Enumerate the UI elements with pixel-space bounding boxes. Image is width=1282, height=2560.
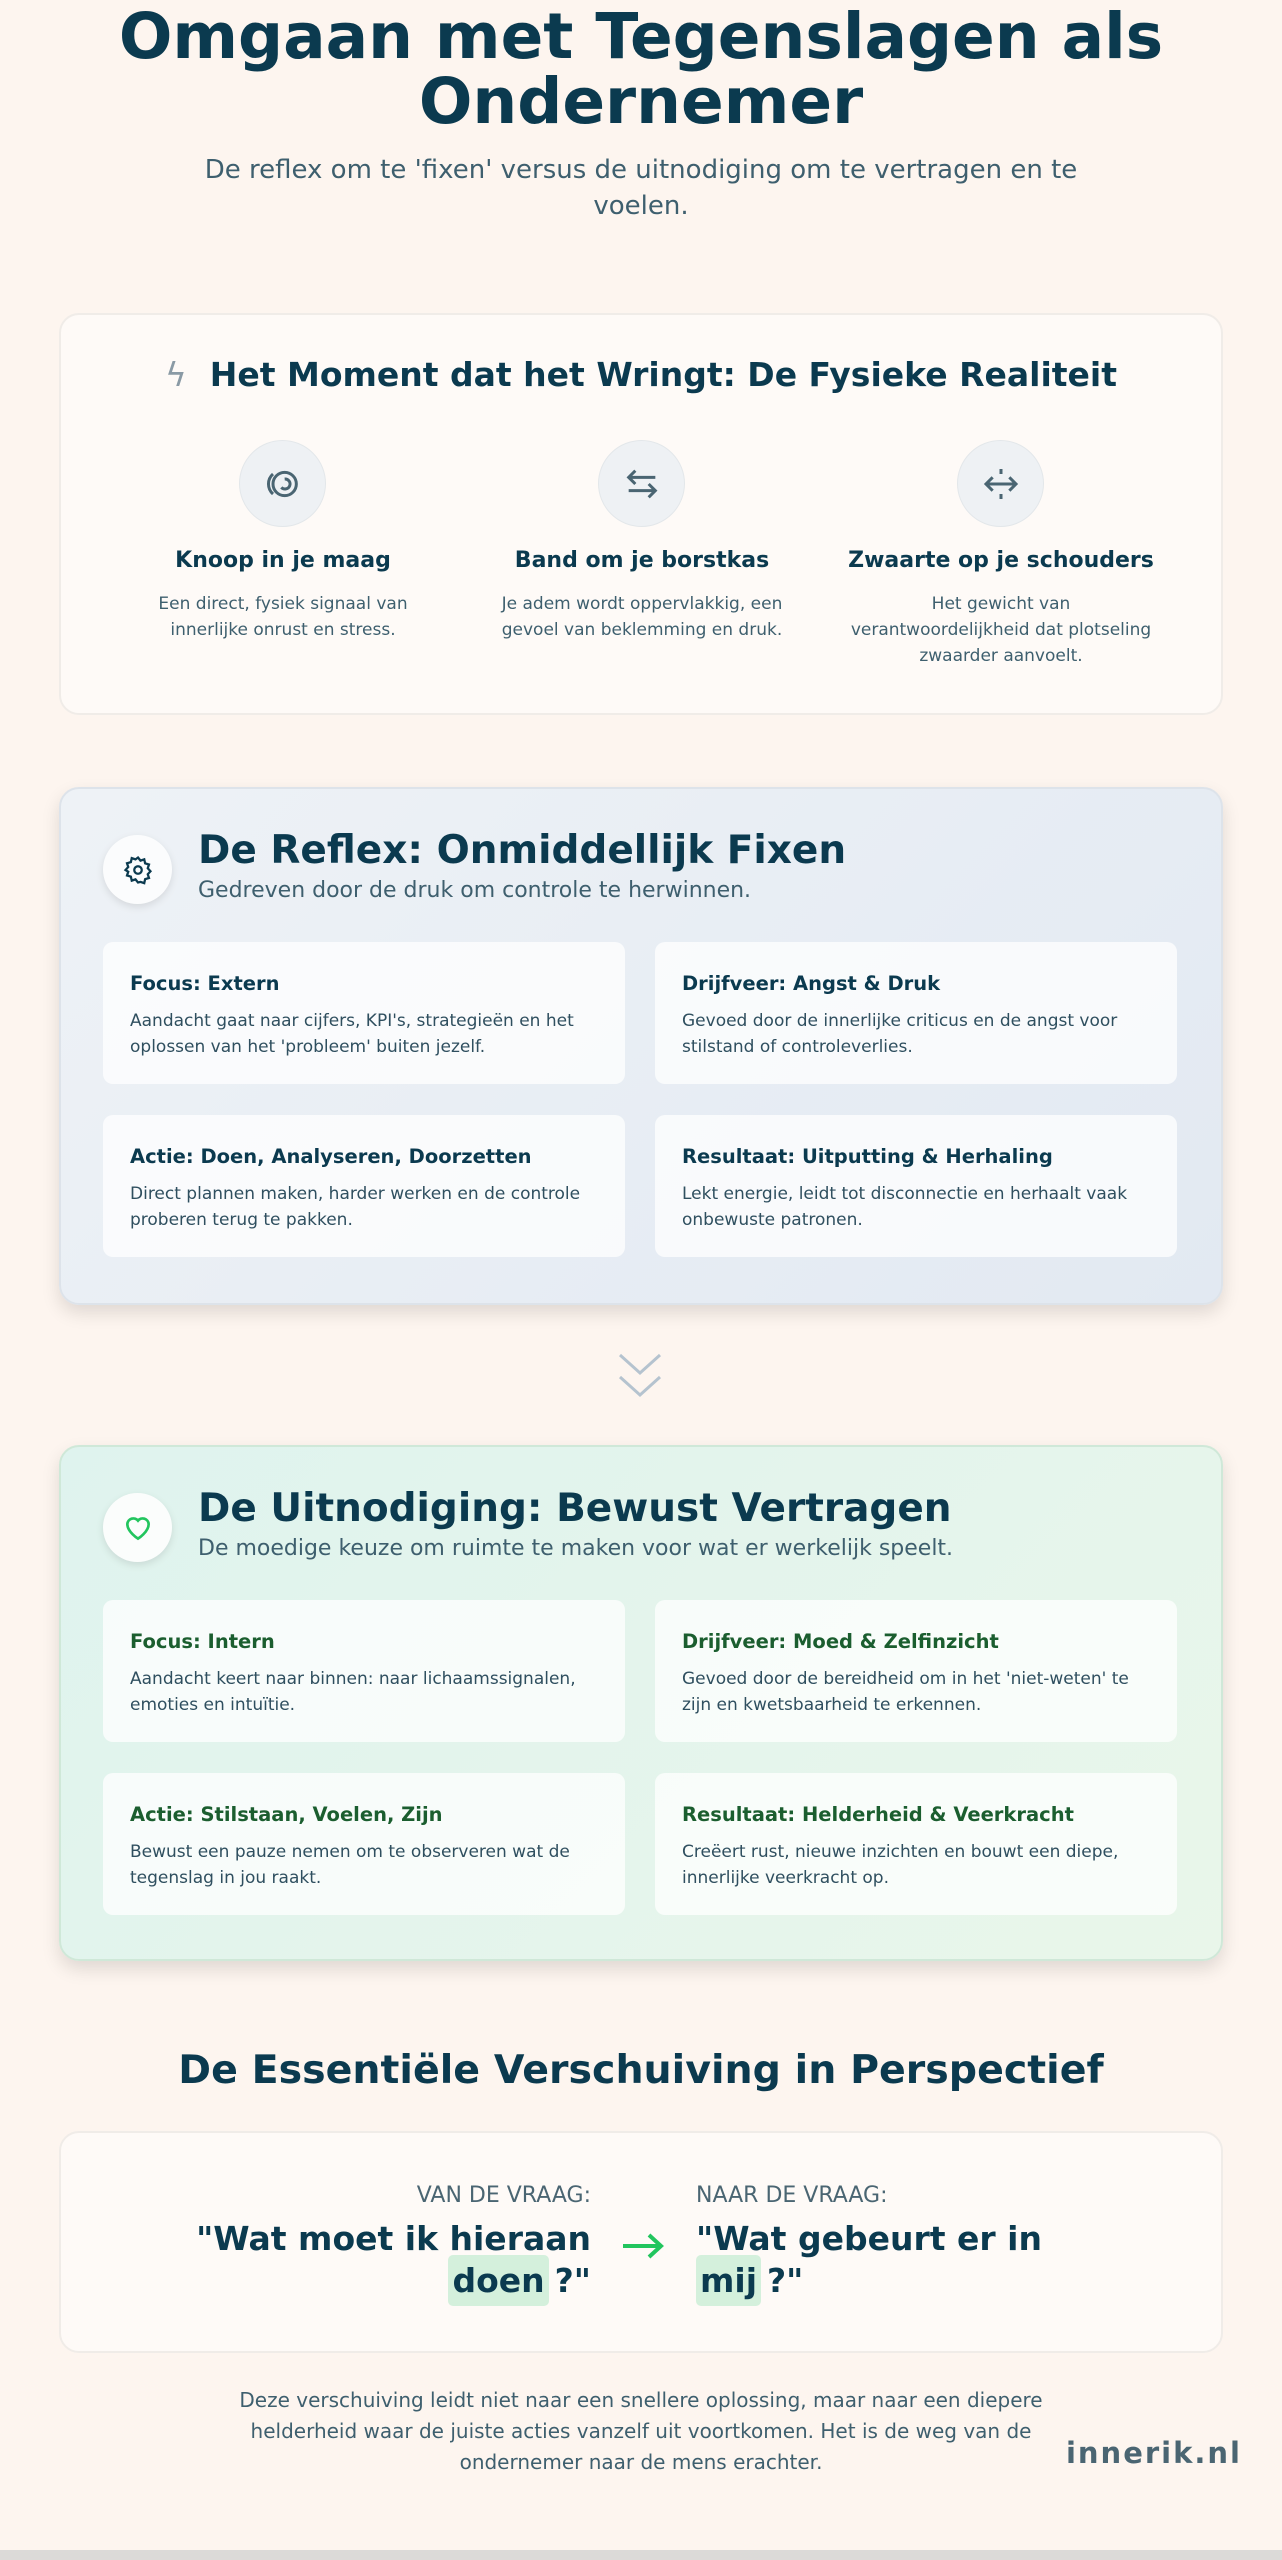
card: Focus: Extern — [130, 972, 280, 995]
card — [655, 1115, 1177, 1257]
card: Actie: Stilstaan, Voelen, Zijn — [130, 1803, 443, 1826]
card — [103, 1115, 625, 1257]
subheading: Gedreven door de druk om controle te herwinnen. — [198, 878, 751, 903]
card: Gevoed door de bereidheid om in het 'niet-weten' te zijn en kwetsbaarheid te erkennen. — [682, 1669, 1129, 1715]
title: Ondernemer — [419, 65, 863, 138]
from question: VAN DE VRAAG: — [417, 2183, 591, 2208]
from question — [196, 2183, 591, 2306]
item 1 — [158, 548, 408, 640]
card: Lekt energie, leidt tot disconnectie en herhaalt vaak onbewuste patronen. — [682, 1184, 1127, 1230]
item 2: Band om je borstkas — [515, 548, 769, 573]
icon: gear — [103, 835, 172, 904]
subtitle: De reflex om te 'fixen' versus de uitnodiging om te vertragen en te voelen. — [205, 155, 1077, 221]
to question — [696, 2183, 1042, 2306]
card: Resultaat: Uitputting & Herhaling — [682, 1145, 1053, 1168]
item 2: Je adem wordt oppervlakkig, een gevoel van beklemming en druk. — [502, 594, 782, 640]
heading: De Reflex: Onmiddellijk Fixen — [198, 828, 846, 873]
to question: "Wat gebeurt er in mij ?" — [696, 2219, 1042, 2300]
icon: weight — [957, 440, 1044, 527]
item 2 — [500, 548, 782, 640]
arrow: chevrons — [619, 1354, 661, 1397]
card: Actie: Doen, Analyseren, Doorzetten — [130, 1145, 532, 1168]
subheading: De moedige keuze om ruimte te maken voor wat er werkelijk speelt. — [198, 1536, 953, 1561]
card: Gevoed door de innerlijke criticus en de angst voor stilstand of controleverlies. — [682, 1011, 1117, 1057]
arrow — [623, 2234, 664, 2258]
card — [103, 942, 625, 1084]
card — [655, 1773, 1177, 1915]
card: Creëert rust, nieuwe inzichten en bouwt een diepe, innerlijke veerkracht op. — [682, 1842, 1118, 1888]
card: Direct plannen maken, harder werken en de controle proberen terug te pakken. — [130, 1184, 580, 1230]
item 3: Het gewicht van verantwoordelijkheid dat plotseling zwaarder aanvoelt. — [851, 594, 1151, 666]
card: Aandacht keert naar binnen: naar lichaamssignalen, emoties en intuïtie. — [130, 1669, 576, 1715]
panel: shift — [59, 2131, 1223, 2353]
icon: heart — [103, 1493, 172, 1562]
heading: De Uitnodiging: Bewust Vertragen — [198, 1486, 952, 1531]
title — [119, 0, 1163, 138]
icon: band — [598, 440, 685, 527]
card: Drijfveer: Angst & Druk — [682, 972, 940, 995]
brand: innerik.nl — [1066, 2436, 1242, 2470]
heading: perspective: De Essentiële Verschuiving in Perspectief — [178, 2047, 1104, 2093]
heading: ϟ Het Moment dat het Wringt: De Fysieke Realiteit — [165, 355, 1117, 394]
panel: reflex — [59, 787, 1223, 1305]
from question: "Wat moet ik hieraan doen ?" — [196, 2219, 591, 2300]
footer text: Deze verschuiving leidt niet naar een snellere oplossing, maar naar een diepere helderheid waar de juiste acties vanzelf uit voortkomen. Het is de weg van de ondernemer naar de mens erachter. — [239, 2388, 1043, 2474]
card: Focus: Intern — [130, 1630, 275, 1653]
card — [655, 942, 1177, 1084]
title: Omgaan met Tegenslagen als — [119, 0, 1163, 73]
card — [103, 1600, 625, 1742]
panel: physical reality — [59, 313, 1223, 715]
card: Resultaat: Helderheid & Veerkracht — [682, 1803, 1074, 1826]
item 1: Een direct, fysiek signaal van innerlijke onrust en stress. — [158, 594, 408, 640]
item 3: Zwaarte op je schouders — [848, 548, 1154, 573]
item 3 — [848, 548, 1154, 666]
card — [655, 1600, 1177, 1742]
card — [103, 1773, 625, 1915]
panel: invitation — [59, 1445, 1223, 1961]
icon: knot — [239, 440, 326, 527]
card: Bewust een pauze nemen om te observeren wat de tegenslag in jou raakt. — [130, 1842, 570, 1888]
card: Drijfveer: Moed & Zelfinzicht — [682, 1630, 999, 1653]
card: Aandacht gaat naar cijfers, KPI's, strategieën en het oplossen van het 'probleem' buiten jezelf. — [130, 1011, 574, 1057]
to question: NAAR DE VRAAG: — [696, 2183, 888, 2208]
item 1: Knoop in je maag — [175, 548, 391, 573]
